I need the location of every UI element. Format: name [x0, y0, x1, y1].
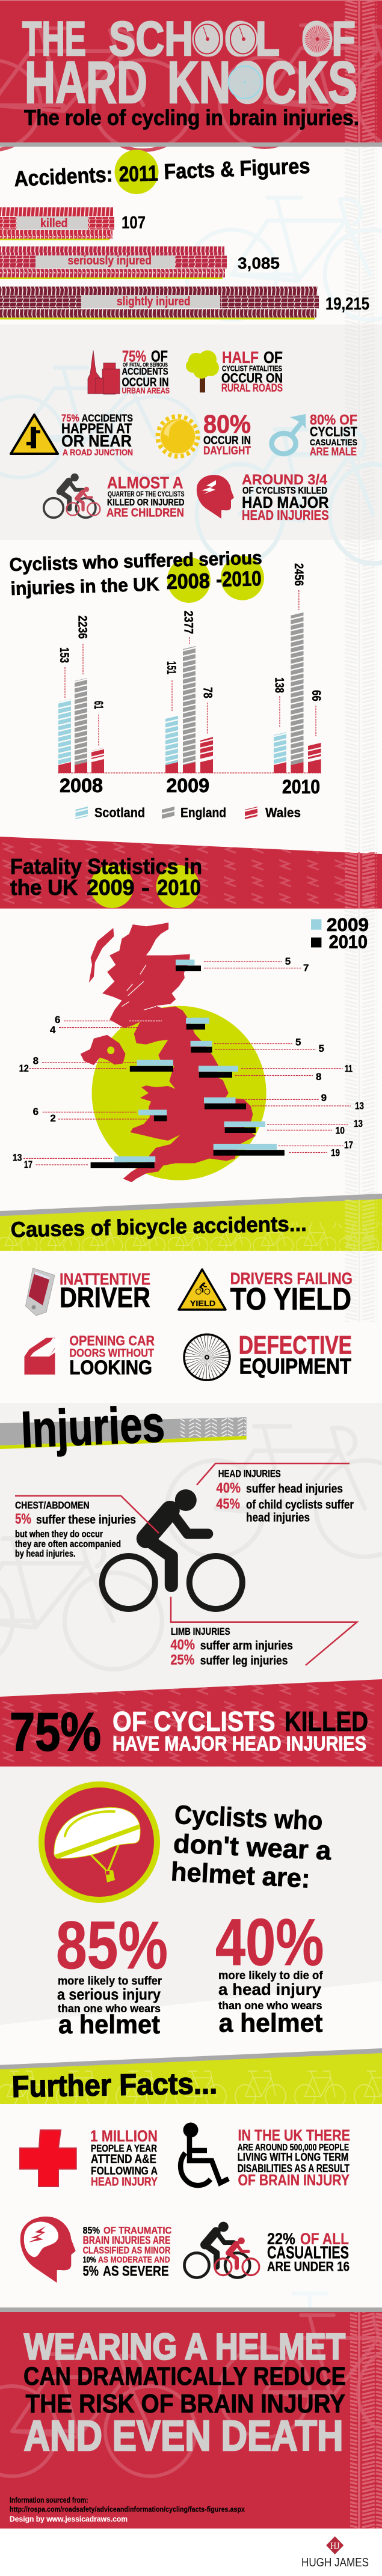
icon: dial wheels in title [193, 22, 332, 56]
logo: Hugh James [301, 2536, 369, 2569]
header banner [0, 0, 382, 150]
title: SCHOOL [109, 12, 280, 66]
bar: killed 107: killed [40, 217, 67, 230]
stat: 40 percent: 40% [215, 1906, 324, 1980]
faint bicycle seat above footer [292, 2294, 328, 2308]
legend: Wales [265, 805, 301, 820]
fact: daylight [158, 410, 251, 457]
icon: yield sign: YIELD [190, 1299, 215, 1308]
text: daylight [203, 410, 251, 457]
callout: head injuries: 45% [217, 1496, 240, 1512]
sources and credit [10, 2495, 245, 2524]
text: rural: OF [263, 348, 283, 367]
bar: seriously injured 3,085 [0, 246, 280, 279]
callout: chest and abdomen: suffer these injuries [36, 1513, 136, 1527]
icon: adult and child cyclists [184, 2222, 259, 2278]
text: CLASSIFIED AS MINOR [83, 2244, 170, 2256]
text: INATTENTIVE [60, 1269, 150, 1288]
banner: 75 percent of cyclists killed: 75% [10, 1702, 101, 1762]
heading: accidents facts and figures: 2011 [119, 160, 158, 186]
map legend: 2010 [329, 932, 368, 953]
bars 2009: 78 [201, 687, 214, 698]
text: head injuries [242, 472, 329, 523]
bars 2009: 2009 [166, 775, 209, 796]
title: HARD [25, 49, 147, 115]
banner: 75 percent of cyclists killed: KILLED [285, 1706, 368, 1737]
icon: sun [158, 417, 197, 456]
closing message: THE RISK OF BRAIN INJURY [25, 2389, 345, 2419]
callout: limb injuries: 25% [170, 1652, 194, 1668]
text: OPENING CAR [69, 1332, 155, 1348]
callout: limb injuries: LIMB INJURIES [171, 1626, 230, 1637]
data bars and labels: 4 [50, 1024, 56, 1036]
subtitle: The role of cycling in brain injuries. [24, 105, 359, 130]
text: 22% [267, 2230, 295, 2248]
heading band: injuries: Injuries [20, 1396, 166, 1459]
callout: head injuries: suffer head injuries [246, 1482, 343, 1495]
text: urban: ACCIDENTS [122, 365, 168, 377]
text: ATTEND A&E [91, 2152, 156, 2166]
text: urban: OF FATAL OR SERIOUS [123, 362, 168, 368]
cause: defective equipment [184, 1331, 352, 1380]
text [60, 1269, 150, 1314]
text: junction: HAPPEN AT [61, 421, 132, 437]
bars 2010: 2456 [292, 563, 306, 586]
heading: cyclists without helmets: helmet are: [170, 1857, 311, 1894]
icon: adult and child cyclists [44, 474, 100, 517]
data bars and labels: 9 [321, 1092, 327, 1103]
cause: opening car doors [24, 1332, 155, 1379]
banner: 75 percent of cyclists killed [0, 1679, 382, 1766]
sources and credit: Design by www.jessicadraws.com [10, 2515, 128, 2524]
text [239, 1331, 352, 1379]
callout: head injuries: HEAD INJURIES [218, 1468, 281, 1479]
text: 85% [83, 2225, 100, 2236]
text: 5% [83, 2263, 99, 2280]
text: daylight: OCCUR IN [203, 434, 251, 447]
data bars and labels: 11 [345, 1063, 353, 1075]
text: rural: HALF [222, 348, 259, 367]
bar: seriously injured 3,085: 3,085 [238, 254, 280, 272]
icon: blue wheel in title [229, 66, 261, 99]
text: urban: OF [151, 347, 168, 365]
text: ARE UNDER 16 [267, 2259, 350, 2274]
callout: chest and abdomen: by head injuries. [15, 1549, 76, 1559]
title: THE [22, 12, 86, 66]
text: EQUIPMENT [239, 1354, 351, 1379]
map outline [81, 923, 256, 1182]
icon: wheelchair [180, 2123, 229, 2185]
data bars and labels [13, 956, 364, 1170]
sources and credit: http://rospa.com/roadsafety/adviceandinformation/cycling/facts-figures.aspx [10, 2505, 245, 2513]
heading: cyclists without helmets: don't wear a [173, 1829, 332, 1866]
data bars and labels: 17 [344, 1139, 353, 1150]
data bars and labels: 6 [33, 1106, 39, 1117]
text: OF TRAUMATIC [103, 2225, 171, 2236]
data bars and labels: 5 [295, 1037, 301, 1048]
sources and credit: Information sourced from: [10, 2495, 88, 2504]
callout: head injuries: of child cyclists suffer [246, 1498, 354, 1512]
data bars and labels: 8 [33, 1055, 39, 1066]
callout: chest and abdomen: they are often accompanied [15, 1539, 121, 1549]
data bars and labels: 5 [285, 956, 291, 967]
heading band: further facts [0, 2048, 382, 2104]
text: TO YIELD [230, 1282, 351, 1317]
faint bicycle background [186, 198, 382, 320]
heading: serious injuries [9, 547, 264, 603]
bar: slightly injured 19,215 [0, 287, 369, 320]
heading band: fatality statistics: 2009 [87, 875, 135, 900]
heading: serious injuries: 2008 [166, 569, 210, 594]
panel: key accident facts [0, 325, 382, 564]
legend: Scotland [94, 805, 145, 820]
data bars and labels: 7 [303, 962, 309, 974]
callout: limb injuries [170, 1626, 293, 1668]
text [83, 2225, 171, 2280]
icon: male symbol [272, 414, 306, 454]
bar: killed 107 [0, 207, 146, 240]
text: male: CASUALTIES [310, 438, 357, 448]
heading band: further facts: Further Facts... [11, 2066, 218, 2104]
logo: Hugh James: HJ [330, 2541, 339, 2551]
text: FOLLOWING A [91, 2165, 158, 2177]
callout: chest and abdomen: but when they do occur [15, 1530, 103, 1540]
bars 2010: 2010 [282, 776, 320, 798]
text: DRIVERS FAILING [230, 1269, 353, 1288]
text: urban [122, 347, 170, 395]
text: urban: 75% [122, 347, 146, 365]
white footer strip [0, 2529, 382, 2576]
data bars and labels: 13 [13, 1152, 22, 1163]
cause: failing to yield [179, 1269, 353, 1317]
text: children: KILLED OR INJURED [107, 498, 184, 508]
stat: 85 percent: a serious injury [57, 1985, 161, 2003]
heading band: fatality statistics: 2010 [157, 875, 201, 900]
text: male: CYCLIST [310, 424, 357, 439]
text: children: ALMOST A [107, 474, 183, 492]
bars 2010: 138 [272, 677, 286, 693]
stat: 85 percent [56, 1908, 168, 2039]
text: PEOPLE A YEAR [91, 2143, 157, 2154]
cause: inattentive driver [25, 1268, 150, 1316]
icon: city [88, 350, 120, 394]
stat: 40 percent: more likely to die of [218, 1970, 323, 1982]
text [69, 1332, 155, 1379]
text: junction: ACCIDENTS [82, 412, 133, 424]
text [230, 1269, 353, 1317]
text: children [106, 474, 185, 519]
heading band: fatality statistics: Fatality Statistics in [10, 854, 202, 879]
text: head injuries: AROUND 3/4 [242, 472, 328, 488]
text: junction: A ROAD JUNCTION [63, 448, 133, 458]
text: rural: RURAL ROADS [221, 382, 283, 394]
bar chart: serious injuries [57, 563, 323, 820]
data bars and labels: 19 [331, 1147, 340, 1159]
fact: one million [20, 2127, 158, 2189]
text: urban: URBAN AREAS [122, 385, 170, 395]
title [22, 12, 357, 115]
text: DOORS WITHOUT [69, 1347, 154, 1360]
callout: limb injuries: suffer arm injuries [200, 1639, 293, 1652]
fact: major head injuries [197, 472, 329, 523]
heading band: fatality statistics: - [141, 875, 150, 900]
text: children: QUARTER OF THE CYCLISTS [108, 491, 185, 498]
green circle [92, 1006, 266, 1180]
text: rural: CYCLIST FATALITIES [222, 364, 282, 373]
stat: 40 percent [215, 1906, 324, 2038]
text: male [310, 412, 357, 458]
bar: slightly injured 19,215: slightly injured [117, 295, 191, 308]
data bars and labels: 5 [319, 1043, 324, 1054]
text: head injuries: OF CYCLISTS KILLED [242, 485, 327, 496]
text: CASUALTIES [267, 2243, 349, 2262]
closing message [23, 2327, 346, 2460]
callout: limb injuries: suffer leg injuries [200, 1654, 288, 1667]
heading: accidents facts and figures [13, 150, 310, 194]
callout: head injuries: 40% [217, 1480, 241, 1496]
bar: slightly injured 19,215: 19,215 [325, 295, 369, 314]
icon: head with brain [20, 2217, 76, 2283]
text: LOOKING [69, 1357, 152, 1379]
data bars and labels: 13 [355, 1100, 364, 1112]
stat: 40 percent: than one who wears [218, 2000, 322, 2012]
callout: head injuries: head injuries [246, 1512, 310, 1525]
bars 2009: 2377 [182, 611, 195, 634]
text: 1 MILLION [90, 2127, 158, 2145]
data bars and labels: 6 [55, 1014, 60, 1025]
data bars and labels: 2 [50, 1113, 56, 1124]
text: DRIVER [60, 1282, 150, 1314]
data bars and labels: 13 [354, 1118, 363, 1129]
bars 2009 [164, 611, 214, 796]
heading: accidents facts and figures: Accidents: [13, 162, 113, 191]
bars 2008: 2008 [60, 775, 103, 796]
callout: chest and abdomen [15, 1500, 136, 1559]
heading band: causes of bicycle accidents [0, 1194, 382, 1251]
heading band: causes of bicycle accidents: Causes of bicycle accidents... [10, 1211, 307, 1242]
heading: serious injuries: -2010 [216, 567, 262, 591]
text: junction: 75% [61, 412, 79, 424]
icon: junction warning sign [11, 415, 58, 454]
text: OF BRAIN INJURY [238, 2171, 350, 2189]
legend: England [180, 805, 226, 820]
callout: chest and abdomen: 5% [15, 1511, 31, 1527]
heading: cyclists without helmets [170, 1800, 332, 1894]
data bars and labels: 17 [24, 1159, 32, 1170]
text: head injuries: HAD MAJOR [242, 493, 329, 511]
fact: male casualties [272, 412, 357, 458]
text [238, 2126, 350, 2189]
fact: casualties under 16 [184, 2222, 350, 2278]
text: urban: OCCUR IN [122, 376, 168, 389]
callout: chest and abdomen: CHEST/ABDOMEN [15, 1500, 90, 1511]
text: DISABILITIES AS A RESULT [238, 2162, 350, 2175]
text: OF ALL [300, 2230, 349, 2248]
heading band: fatality statistics [0, 837, 382, 909]
heading: accidents facts and figures: Facts & Figures [164, 153, 310, 184]
text: daylight: DAYLIGHT [203, 444, 251, 457]
fact: road junction [11, 412, 133, 458]
callout: limb injuries: 40% [170, 1637, 195, 1653]
bar: killed 107: 107 [122, 213, 146, 233]
map: UK fatalities [13, 914, 369, 1182]
faint tyre track background [344, 147, 377, 1322]
heading band: fatality statistics: the UK [10, 875, 78, 900]
icon: helmet badge [39, 1781, 160, 1903]
legend [76, 805, 301, 820]
text: junction: OR NEAR [61, 432, 132, 450]
fact: urban areas [88, 347, 170, 395]
text: ARE AROUND 500,000 PEOPLE [238, 2143, 349, 2153]
fact: rural roads [186, 348, 283, 394]
bars 2008: 61 [91, 701, 105, 709]
data bars and labels: 10 [336, 1125, 345, 1137]
icon: tree [186, 350, 219, 392]
heading: serious injuries: Cyclists who suffered serious [9, 547, 262, 575]
stat: 85 percent: 85% [56, 1908, 168, 1983]
text: rural: OCCUR ON [221, 371, 283, 386]
text: BRAIN INJURIES ARE [83, 2234, 170, 2246]
data bars and labels: 12 [19, 1063, 29, 1074]
fact: long term disabilities [180, 2123, 350, 2189]
text: IN THE UK THERE [238, 2126, 350, 2144]
panel: injuries [0, 1403, 382, 2025]
bars 2008: 2236 [75, 615, 89, 639]
bars 2010: 66 [309, 690, 323, 701]
bars 2008: 153 [57, 647, 71, 663]
fact: children [44, 474, 185, 519]
heading: serious injuries: injuries in the UK [10, 573, 160, 599]
bars 2008 [57, 615, 105, 796]
text: head injuries: HEAD INJURIES [242, 507, 329, 523]
icon: car door [24, 1338, 63, 1375]
data bars and labels: 8 [316, 1071, 321, 1082]
bars 2009: 151 [164, 661, 178, 674]
heading: cyclists without helmets: Cyclists who [174, 1800, 323, 1836]
text [267, 2230, 350, 2274]
stat: 40 percent: a helmet [219, 2009, 323, 2038]
logo: Hugh James: HUGH JAMES [301, 2556, 369, 2569]
text: daylight: 80% [203, 410, 251, 439]
title: OF [301, 12, 356, 66]
fact: traumatic brain injuries [20, 2217, 171, 2283]
text: HEAD INJURY [91, 2176, 158, 2189]
callout: head injuries [217, 1468, 354, 1525]
stat: 85 percent: more likely to suffer [58, 1975, 162, 1988]
icon: mobile phone [25, 1268, 55, 1316]
footer banner [0, 2307, 382, 2529]
banner: 75 percent of cyclists killed: OF CYCLISTS [112, 1706, 276, 1737]
map legend: 2009 [327, 914, 369, 935]
text: children: ARE CHILDREN [106, 506, 184, 519]
text: rural [221, 348, 283, 394]
stat: 85 percent: a helmet [58, 2010, 160, 2039]
map legend [311, 914, 369, 953]
text: LIVING WITH LONG TERM [238, 2151, 348, 2163]
bars 2010 [272, 563, 323, 798]
bar: seriously injured 3,085: seriously injured [67, 254, 152, 267]
text: AS SEVERE [103, 2263, 169, 2280]
icon: head with lightning [197, 475, 234, 519]
text: 10% [83, 2254, 96, 2265]
text: male: ARE MALE [310, 446, 357, 458]
text: junction [61, 412, 133, 458]
text: male: 80% OF [310, 412, 357, 429]
figure: large cyclist with callout lines [15, 1463, 357, 1665]
stat: 40 percent: a head injury [218, 1980, 321, 1998]
text [90, 2127, 158, 2189]
text: AS MODERATE AND [98, 2254, 170, 2265]
icon: yield sign [179, 1269, 226, 1310]
stat: 85 percent: than one who wears [58, 2003, 161, 2015]
icon: red cross [20, 2130, 76, 2187]
icon: bicycle wheel [184, 1334, 230, 1380]
text: DEFECTIVE [239, 1331, 352, 1360]
